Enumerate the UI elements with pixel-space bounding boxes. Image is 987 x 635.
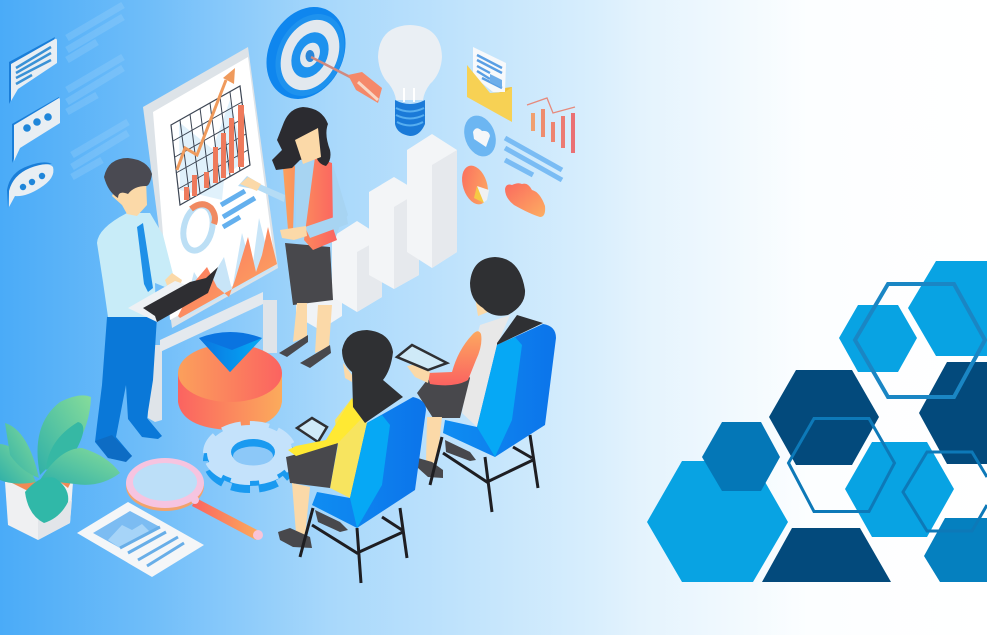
hexagon: mid blue (702, 422, 780, 491)
hexagon: outline center (788, 418, 894, 512)
hexagon: top right (908, 261, 987, 356)
laptop (128, 281, 190, 322)
icon: light bulb (378, 25, 442, 136)
plant (0, 395, 120, 540)
hexagon cluster (647, 261, 987, 582)
icon: target with arrow (251, 0, 382, 113)
tablet (397, 345, 447, 370)
tablet (297, 418, 327, 442)
hexagon: light blue center (845, 442, 954, 537)
icon: speech bubbles (7, 5, 128, 208)
hexagon: outline top (855, 284, 985, 397)
hexagon: lower right (924, 518, 987, 582)
person: seated woman in front chair (278, 330, 426, 583)
hair (470, 257, 525, 316)
trapezoid: navy base (762, 528, 891, 582)
chair (430, 315, 556, 512)
hexagon: top light blue small (839, 305, 917, 372)
person: seated woman in back chair (397, 257, 556, 512)
area chart (184, 218, 274, 315)
document sheet (77, 502, 204, 577)
donut chart (179, 202, 217, 254)
hair (342, 330, 403, 423)
hexagon: navy right (919, 362, 987, 464)
hexagon: navy (769, 370, 879, 465)
person: presenter woman (238, 107, 348, 368)
icon: heart badge and list (459, 111, 562, 180)
gear (207, 425, 293, 488)
magnifying glass (126, 458, 263, 540)
hexagon: large light blue (647, 461, 788, 582)
hexagon: outline right (903, 452, 987, 531)
bar towers (296, 134, 457, 330)
pie chart model (178, 332, 282, 430)
person: presenter man (95, 158, 218, 462)
icon: envelope with document (467, 47, 512, 122)
line chart on board (171, 68, 250, 205)
chair (300, 397, 426, 583)
icon: pie and cloud (457, 162, 545, 217)
icon: mini bar chart (527, 98, 575, 153)
presentation board (143, 47, 278, 422)
